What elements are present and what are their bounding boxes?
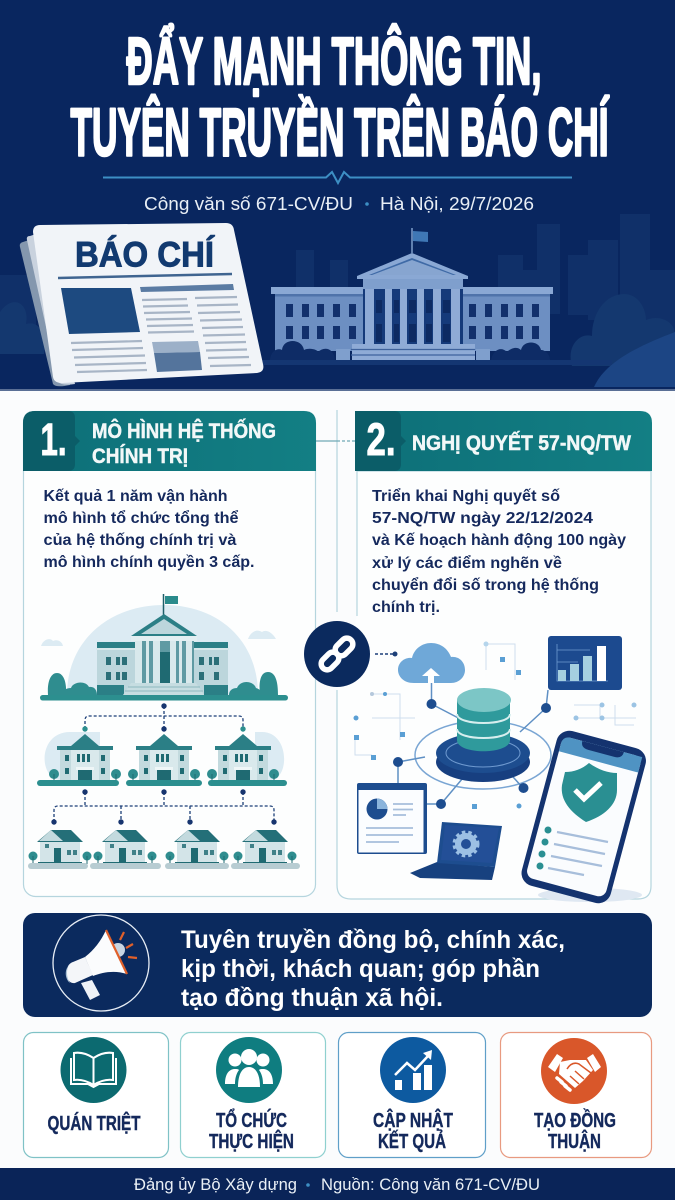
panel 2 text: Triển khai Nghị quyết số — [372, 487, 560, 505]
database hub — [393, 688, 551, 809]
card: update — [338, 1032, 486, 1158]
panel 1 text: mô hình tổ chức tổng thể — [44, 509, 239, 527]
connectors between levels — [54, 706, 274, 822]
card: consensus — [500, 1032, 652, 1158]
icon: open book — [71, 1053, 116, 1087]
card: study — [24, 1032, 168, 1158]
footer — [0, 1168, 675, 1200]
card: study: QUÁN TRIỆT — [48, 1111, 140, 1135]
panel 1 header: 1. — [40, 414, 66, 465]
panel 2 text: chính trị. — [372, 599, 440, 616]
callout text: tạo đồng thuận xã hội. — [181, 984, 443, 1012]
card: organize: THỰC HIỆN — [209, 1129, 294, 1153]
icon: megaphone — [53, 915, 149, 1011]
title — [70, 24, 610, 170]
panel 2 text: xử lý các điểm nghẽn về — [372, 554, 562, 572]
newspaper — [20, 223, 263, 386]
panel 1 text: Kết quả 1 năm vận hành — [44, 488, 228, 505]
provincial buildings — [37, 732, 287, 786]
panel 2 header: NGHỊ QUYẾT 57-NQ/TW — [412, 432, 631, 455]
callout text: kịp thời, khách quan; góp phần — [181, 955, 540, 983]
icon: smartphone with shield — [519, 728, 649, 906]
panel 2 header — [355, 411, 652, 471]
icon: people — [225, 1049, 273, 1087]
icon: link badge — [304, 621, 398, 687]
icon: bar chart screen — [548, 636, 622, 690]
panel 2 text — [372, 487, 626, 616]
connector nodes — [51, 703, 277, 825]
connector between panels — [316, 440, 355, 442]
callout text — [181, 926, 565, 1012]
subtitle — [144, 194, 534, 214]
panel 2 header: 2. — [366, 414, 396, 465]
subtitle: Công văn số 671-CV/ĐU — [144, 194, 353, 214]
footer: Đảng ủy Bộ Xây dựng — [134, 1176, 297, 1194]
card: organize: TỔ CHỨC — [216, 1108, 287, 1132]
panel 2 text: và Kế hoạch hành động 100 ngày — [372, 532, 626, 549]
faint network lines — [355, 644, 636, 755]
icon: report document — [357, 783, 427, 854]
icon: handshake — [548, 1054, 601, 1090]
card: update: CẬP NHẬT — [373, 1108, 453, 1132]
title divider — [103, 172, 572, 183]
panel 1 text: mô hình chính quyền 3 cấp. — [44, 554, 254, 571]
icon: laptop with gear — [410, 822, 502, 880]
subtitle: Hà Nội, 29/7/2026 — [380, 194, 534, 214]
central government building — [40, 594, 288, 700]
government building illustration — [262, 228, 612, 365]
panel 1 header: CHÍNH TRỊ — [92, 445, 188, 468]
card: consensus: TẠO ĐỒNG — [534, 1108, 616, 1132]
header banner — [0, 0, 675, 391]
skyline backdrop — [0, 214, 675, 387]
footer: Nguồn: Công văn 671-CV/ĐU — [321, 1176, 540, 1194]
card: consensus: THUẬN — [548, 1129, 601, 1153]
icon: growth chart — [395, 1050, 432, 1090]
icon: cloud upload — [398, 643, 465, 704]
panel 1 header — [23, 411, 316, 471]
panel 1 header: MÔ HÌNH HỆ THỐNG — [92, 419, 276, 443]
small network nodes — [354, 642, 636, 809]
card: organize — [180, 1032, 326, 1158]
panel 2 text: 57-NQ/TW ngày 22/12/2024 — [372, 510, 593, 527]
panel 2: resolution 57 — [337, 410, 652, 906]
card: update: KẾT QUẢ — [378, 1130, 446, 1153]
panel 1: political system model — [23, 411, 316, 896]
callout banner — [23, 913, 652, 1017]
panel 2 text: chuyển đổi số trong hệ thống — [372, 576, 599, 594]
newspaper masthead: BÁO CHÍ — [75, 234, 215, 274]
panel 1 text — [44, 488, 254, 571]
panel 1 text: của hệ thống chính trị và — [44, 532, 237, 549]
commune houses — [28, 830, 300, 869]
callout text: Tuyên truyền đồng bộ, chính xác, — [181, 926, 565, 954]
